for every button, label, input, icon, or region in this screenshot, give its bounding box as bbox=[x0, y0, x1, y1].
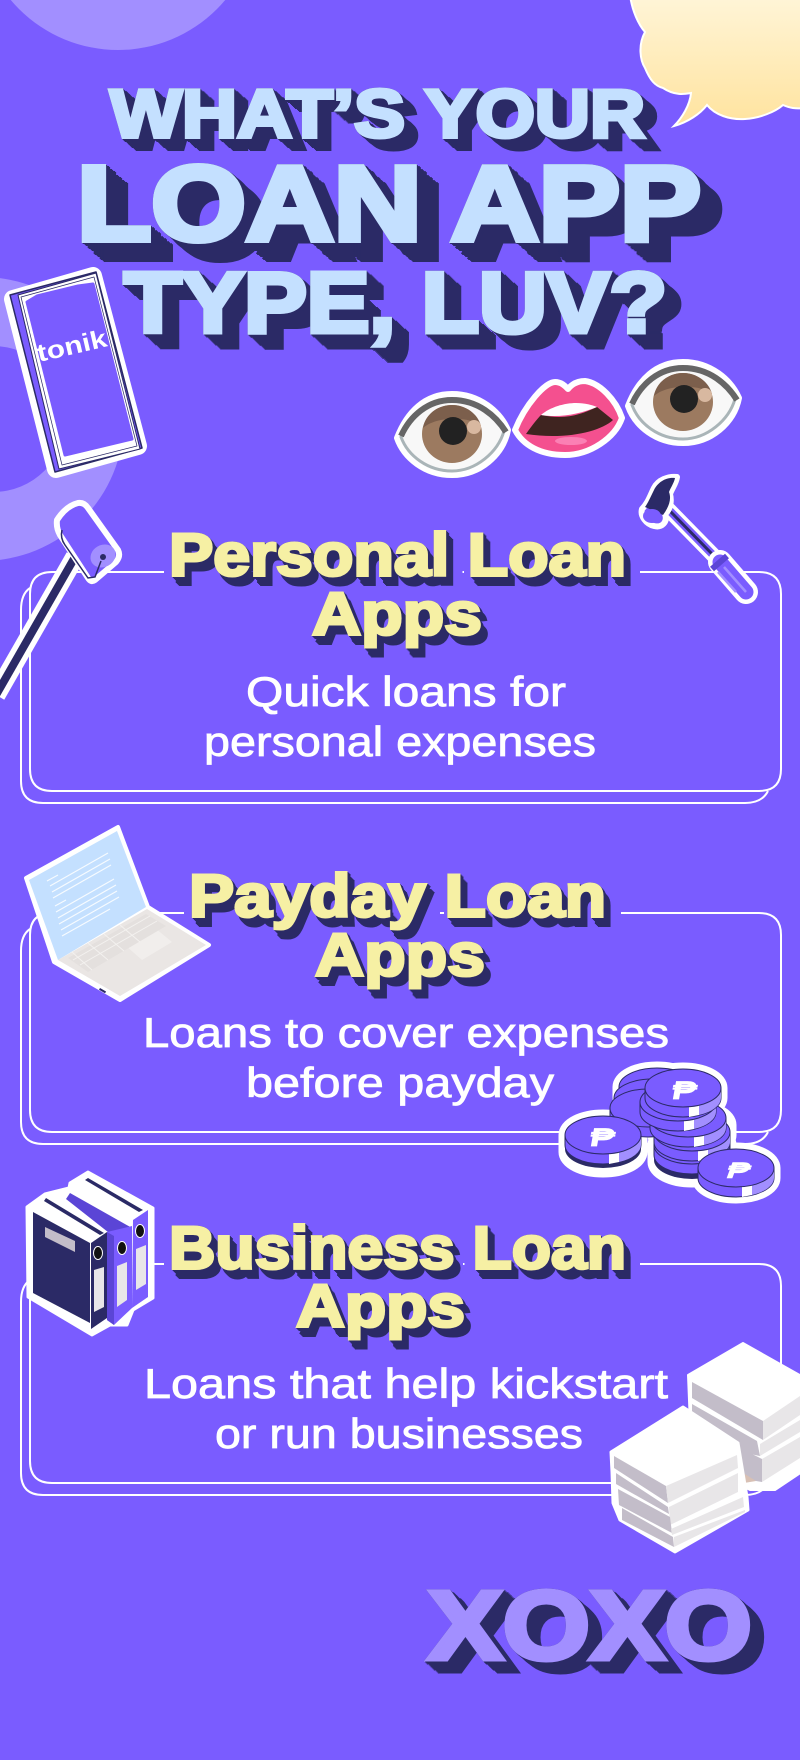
heading: Apps bbox=[315, 922, 485, 988]
card outline bbox=[21, 1263, 781, 1495]
icon: paint roller bbox=[0, 503, 120, 695]
description bbox=[204, 668, 596, 765]
icon: left eye bbox=[397, 394, 508, 475]
icon: peso coins bbox=[565, 1068, 774, 1197]
icon: phone bbox=[10, 272, 142, 472]
heading: Business Loan bbox=[169, 1214, 626, 1282]
panel: personal loan apps bbox=[21, 522, 781, 803]
description: Quick loans for bbox=[246, 668, 566, 715]
coin outline bbox=[565, 1068, 774, 1197]
description bbox=[143, 1009, 669, 1106]
speech bubble bbox=[630, 0, 800, 126]
background ring left bbox=[0, 277, 124, 561]
icon: right eye bbox=[628, 362, 739, 443]
background circle top bbox=[0, 0, 258, 50]
description: personal expenses bbox=[204, 718, 596, 765]
title line 2: LOAN APP bbox=[77, 145, 701, 263]
back stack bbox=[688, 1343, 800, 1490]
small coin: ₱ bbox=[723, 1158, 755, 1183]
description: or run businesses bbox=[215, 1410, 583, 1457]
description bbox=[144, 1360, 668, 1457]
description: Loans that help kickstart bbox=[144, 1360, 668, 1407]
back coins bbox=[610, 1068, 695, 1137]
card outline bbox=[21, 912, 781, 1144]
small coin bbox=[698, 1149, 774, 1197]
title line 3: TYPE, LUV? bbox=[124, 256, 667, 351]
icon: lips bbox=[515, 381, 622, 455]
phone logo: tonik bbox=[34, 325, 110, 368]
closing text xoxo: XOXO bbox=[428, 1571, 752, 1680]
left coin: ₱ bbox=[588, 1123, 617, 1152]
panel: payday loan apps bbox=[21, 862, 781, 1144]
icon: laptop bbox=[26, 827, 209, 1000]
icon: binders bbox=[27, 1172, 153, 1335]
stacked coins: ₱ bbox=[670, 1076, 699, 1105]
heading: Apps bbox=[296, 1272, 465, 1340]
title line 1: WHAT’S YOUR bbox=[110, 76, 645, 152]
card outline bbox=[21, 571, 781, 803]
description: Loans to cover expenses bbox=[143, 1009, 669, 1056]
heading bbox=[169, 1214, 626, 1340]
heading bbox=[169, 522, 626, 648]
front stack bbox=[611, 1407, 748, 1552]
icon: hammer and screwdriver bbox=[642, 477, 746, 592]
description: before payday bbox=[246, 1059, 554, 1106]
heading: Payday Loan bbox=[189, 862, 606, 930]
heading: Apps bbox=[312, 580, 482, 648]
stacked coins bbox=[640, 1069, 730, 1174]
left coin bbox=[565, 1116, 641, 1164]
heading: Personal Loan bbox=[169, 522, 626, 588]
panel: business loan apps bbox=[21, 1214, 781, 1495]
icon: paper stacks bbox=[611, 1343, 800, 1552]
heading bbox=[189, 862, 606, 988]
title bbox=[77, 76, 701, 351]
